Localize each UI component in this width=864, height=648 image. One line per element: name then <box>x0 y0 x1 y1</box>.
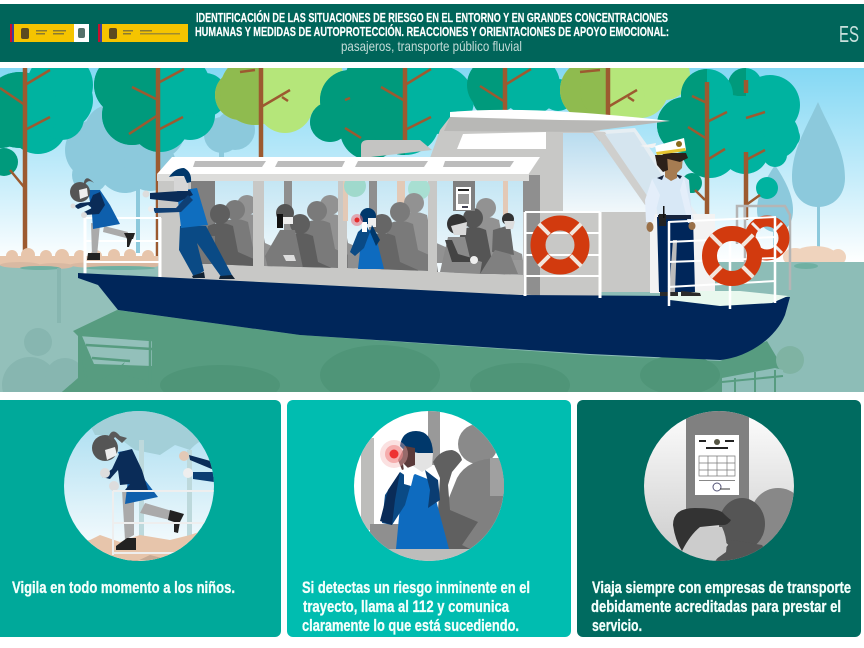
panel: call 112 <box>287 400 571 637</box>
trees <box>0 68 800 256</box>
life ring on foredeck <box>710 234 754 278</box>
notice on pillar <box>453 181 475 211</box>
man reaching for the girl <box>142 168 235 279</box>
caption: trayecto, llama al 112 y comunica <box>303 597 509 616</box>
logo: government of Spain and interior ministry <box>10 24 89 42</box>
passenger cabin <box>157 157 540 296</box>
notice document <box>695 435 739 495</box>
header bar <box>0 4 864 62</box>
river water <box>0 262 864 392</box>
rear deck railing <box>84 218 161 278</box>
logo: civil protection <box>98 24 188 42</box>
caption <box>591 578 851 635</box>
behind railing and life ring <box>737 206 790 290</box>
title <box>195 10 669 54</box>
foredeck <box>665 291 788 306</box>
passengers near the rear <box>440 213 518 274</box>
woman on phone <box>350 208 384 269</box>
caption: Si detectas un riesgo inminente en el <box>302 578 530 597</box>
wheelhouse <box>361 110 715 300</box>
illustration: company accreditation notice <box>644 411 794 561</box>
boat reflection <box>62 310 804 392</box>
caption: servicio. <box>592 616 642 635</box>
panel: accredited companies <box>577 400 861 637</box>
side railing <box>525 212 600 298</box>
passengers, grey silhouettes <box>204 193 523 275</box>
caption: Vigila en todo momento a los niños. <box>12 578 235 597</box>
title: pasajeros, transporte público fluvial <box>341 38 522 54</box>
cabin roof <box>157 157 540 175</box>
panel: watch the children <box>0 400 281 637</box>
title: IDENTIFICACIÓN DE LAS SITUACIONES DE RIESGO EN EL ENTORNO Y EN GRANDES CONCENTRACIONES <box>196 10 668 25</box>
caption: claramente lo que está sucediendo. <box>302 616 519 635</box>
background trees <box>65 100 845 254</box>
foredeck railing <box>668 217 776 309</box>
girl running toward the rail <box>70 178 135 260</box>
caption <box>302 578 530 635</box>
river bank <box>0 246 846 266</box>
hull <box>78 273 790 360</box>
main illustration: river boat scene <box>0 68 864 392</box>
life ring on cabin <box>538 223 582 267</box>
windows <box>191 175 540 296</box>
title: HUMANAS Y MEDIDAS DE AUTOPROTECCIÓN. REACCIONES Y ORIENTACIONES DE APOYO EMOCIONAL: <box>195 24 669 39</box>
illustration: woman calling <box>354 411 504 561</box>
illustration: girl running <box>64 411 214 561</box>
officer <box>640 138 701 296</box>
